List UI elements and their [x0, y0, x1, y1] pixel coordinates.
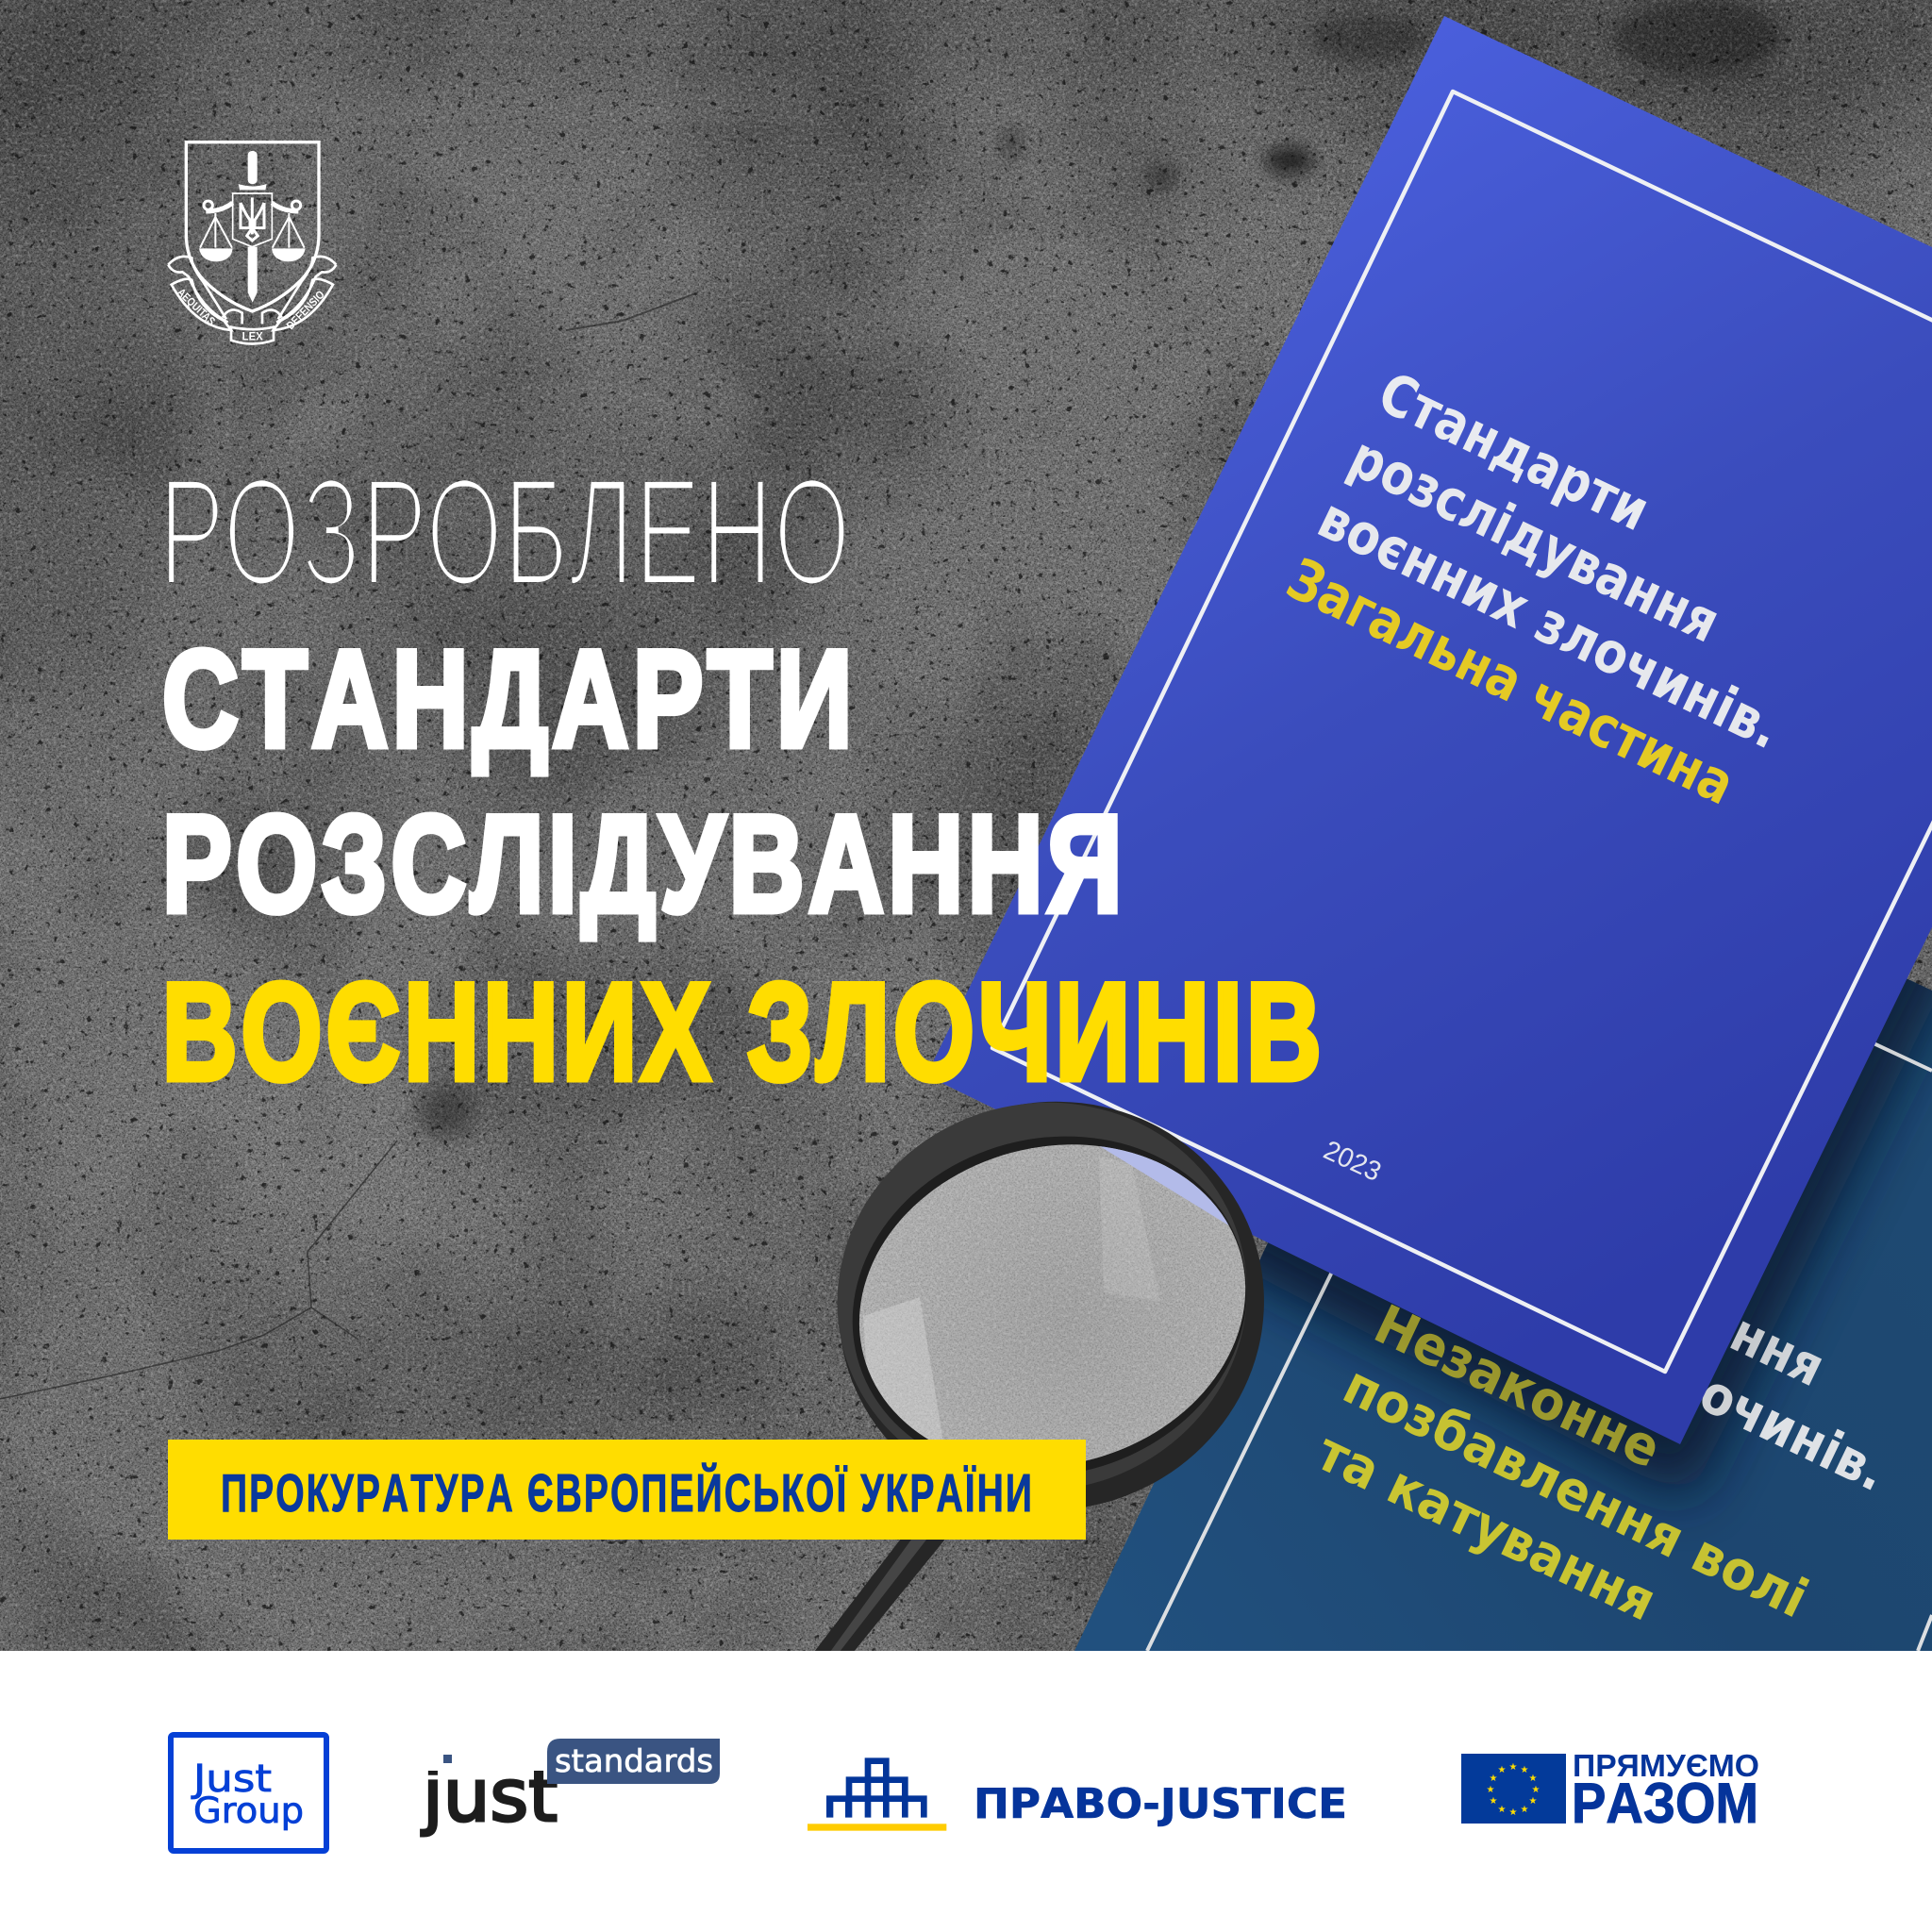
EU stars: ★: [1490, 1774, 1498, 1784]
top book title: Стандарти: [1369, 359, 1659, 544]
frame of lower book: [1145, 1042, 1932, 1651]
logo: EU flag and slogan: РАЗОМ: [1572, 1772, 1758, 1835]
logo: Pravo-Justice: ПРАВО-JUSTICE: [974, 1780, 1347, 1828]
book shadow: [943, 924, 1932, 1476]
frame of top book: [992, 92, 1932, 1372]
top book title: [1276, 359, 1790, 818]
EU stars: ★: [1529, 1796, 1538, 1807]
shield outline: [186, 142, 319, 311]
top book title: Загальна частина: [1276, 546, 1744, 818]
logo: Just Group: Group: [193, 1790, 304, 1831]
small trident shield: [233, 193, 272, 247]
motto ribbon: [168, 257, 336, 343]
motto text: AEQUITAS: [175, 286, 218, 328]
heading: [158, 445, 1325, 1108]
lens: [830, 1123, 1264, 1491]
lattice icon: [808, 1757, 946, 1831]
logo: prosecutor's office coat of arms: [168, 142, 336, 343]
book: general part volume: [926, 16, 1932, 1444]
EU stars: ★: [1521, 1765, 1529, 1775]
EU stars: ★: [1490, 1796, 1498, 1807]
magnifying glass: [792, 1053, 1310, 1652]
logo: Just Group: Just: [191, 1757, 272, 1801]
lower book title: [1307, 1171, 1896, 1633]
logo: just standards: just: [421, 1755, 558, 1839]
lower book title: позбавлення волі: [1334, 1354, 1817, 1630]
EU stars: ★: [1529, 1774, 1538, 1784]
callout: yellow banner: [168, 1440, 1086, 1540]
logo: EU flag and slogan: [1461, 1748, 1759, 1835]
motto text: [175, 286, 327, 343]
callout: yellow banner: ПРОКУРАТУРА ЄВРОПЕЙСЬКОЇ УКРАЇНИ: [221, 1462, 1034, 1524]
logo: Pravo-Justice: [808, 1757, 1347, 1831]
heading line: yellow: ВОЄННИХ ЗЛОЧИНІВ: [162, 955, 1325, 1108]
book: illegal detention volume: [1074, 979, 1932, 1651]
EU stars: [1487, 1762, 1541, 1818]
logo: Just Group: [171, 1735, 326, 1851]
logo: just standards: standards: [555, 1742, 713, 1779]
motto text: LEX: [242, 330, 263, 343]
shadow of top book on lower book: [1259, 979, 1932, 1515]
EU stars: ★: [1509, 1807, 1518, 1818]
rim: [792, 1053, 1310, 1558]
EU stars: ★: [1521, 1805, 1529, 1815]
EU stars: ★: [1532, 1785, 1541, 1795]
top book title: розслідування: [1340, 424, 1729, 657]
handle: [814, 1387, 1000, 1652]
heading line: thin: РОЗРОБЛЕНО: [158, 445, 851, 618]
heading line: bold white second: РОЗСЛІДУВАННЯ: [162, 787, 1126, 941]
motto text: DEFENSIO: [284, 288, 327, 332]
year: 2023: [1319, 1135, 1386, 1188]
logo: just standards: [421, 1739, 720, 1839]
reflected book wedge: [1061, 1123, 1264, 1247]
lower book title: та катування: [1307, 1421, 1665, 1633]
EU stars: ★: [1509, 1762, 1518, 1773]
EU stars: ★: [1498, 1805, 1507, 1815]
top book title: воєнних злочинів.: [1308, 485, 1790, 762]
sword: [239, 151, 267, 303]
footer band: [0, 1651, 1932, 1932]
logo: EU flag and slogan: ПРЯМУЄМО: [1573, 1748, 1759, 1783]
left scale: [199, 201, 233, 261]
lower book title: Незаконне: [1365, 1293, 1670, 1480]
EU stars: ★: [1498, 1765, 1507, 1775]
EU stars: ★: [1487, 1785, 1495, 1795]
heading line: bold white: СТАНДАРТИ: [162, 622, 857, 775]
lower book title: розслідування: [1449, 1171, 1834, 1399]
right scale: [272, 201, 306, 261]
